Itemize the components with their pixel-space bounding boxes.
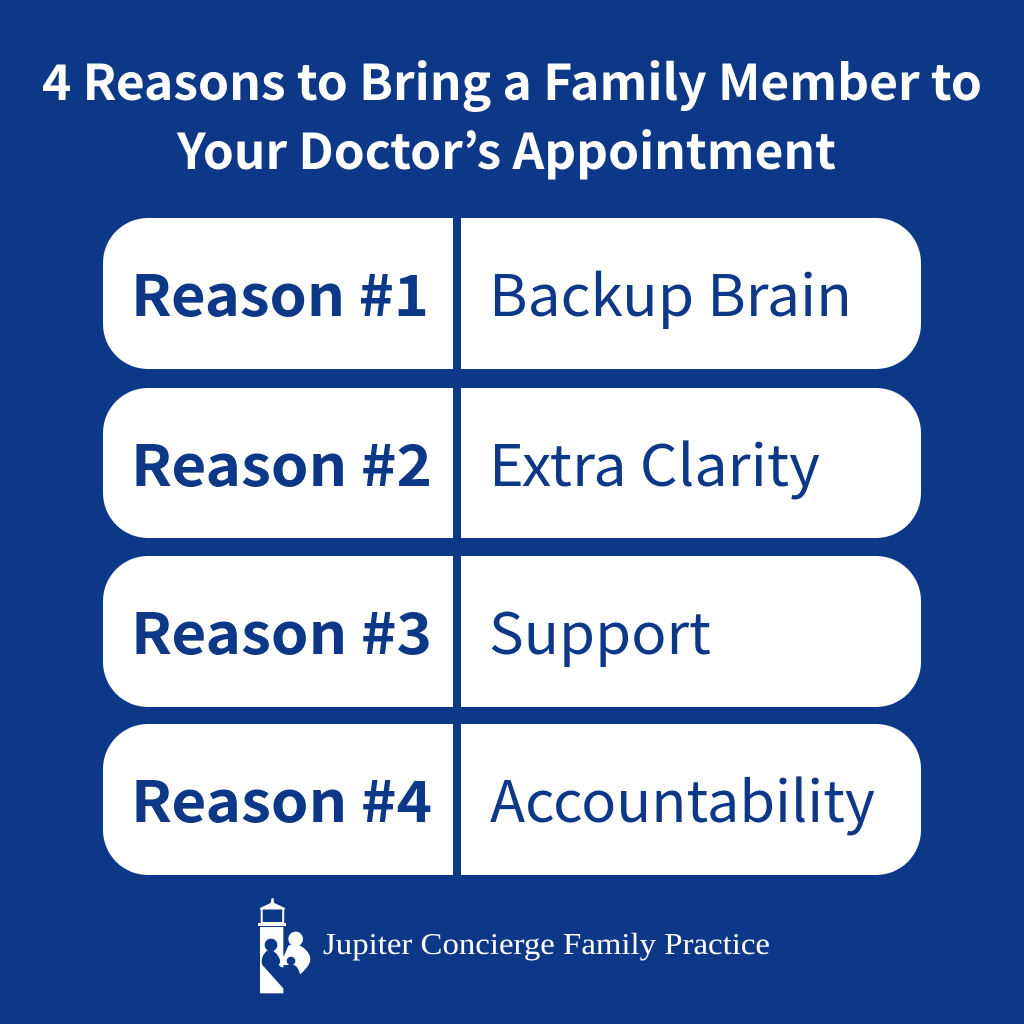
tower and figures [260,927,310,993]
row: reason 4 [103,724,921,875]
row: reason 1: Reason #1 [131,251,429,333]
row: reason 1: Backup Brain [489,251,852,333]
title: 4 Reasons to Bring a Family Member to [42,44,982,115]
row: reason 4: Reason #4 [131,757,432,839]
row: reason 2: Extra Clarity [489,421,820,503]
row: reason 3 [103,556,921,707]
icon: lighthouse and family logo [258,898,310,993]
row: reason 1 [103,218,921,369]
row: reason 3: Support [489,589,711,671]
row: reason 3: Reason #3 [131,589,432,671]
logo wordmark: Jupiter Concierge Family Practice [323,926,770,961]
title [42,44,982,184]
lighthouse lantern [258,898,286,926]
row: reason 4: Accountability [490,757,875,839]
row: reason 2: Reason #2 [131,421,432,503]
title: Your Doctor’s Appointment [176,113,836,184]
row: reason 2 [103,388,921,538]
